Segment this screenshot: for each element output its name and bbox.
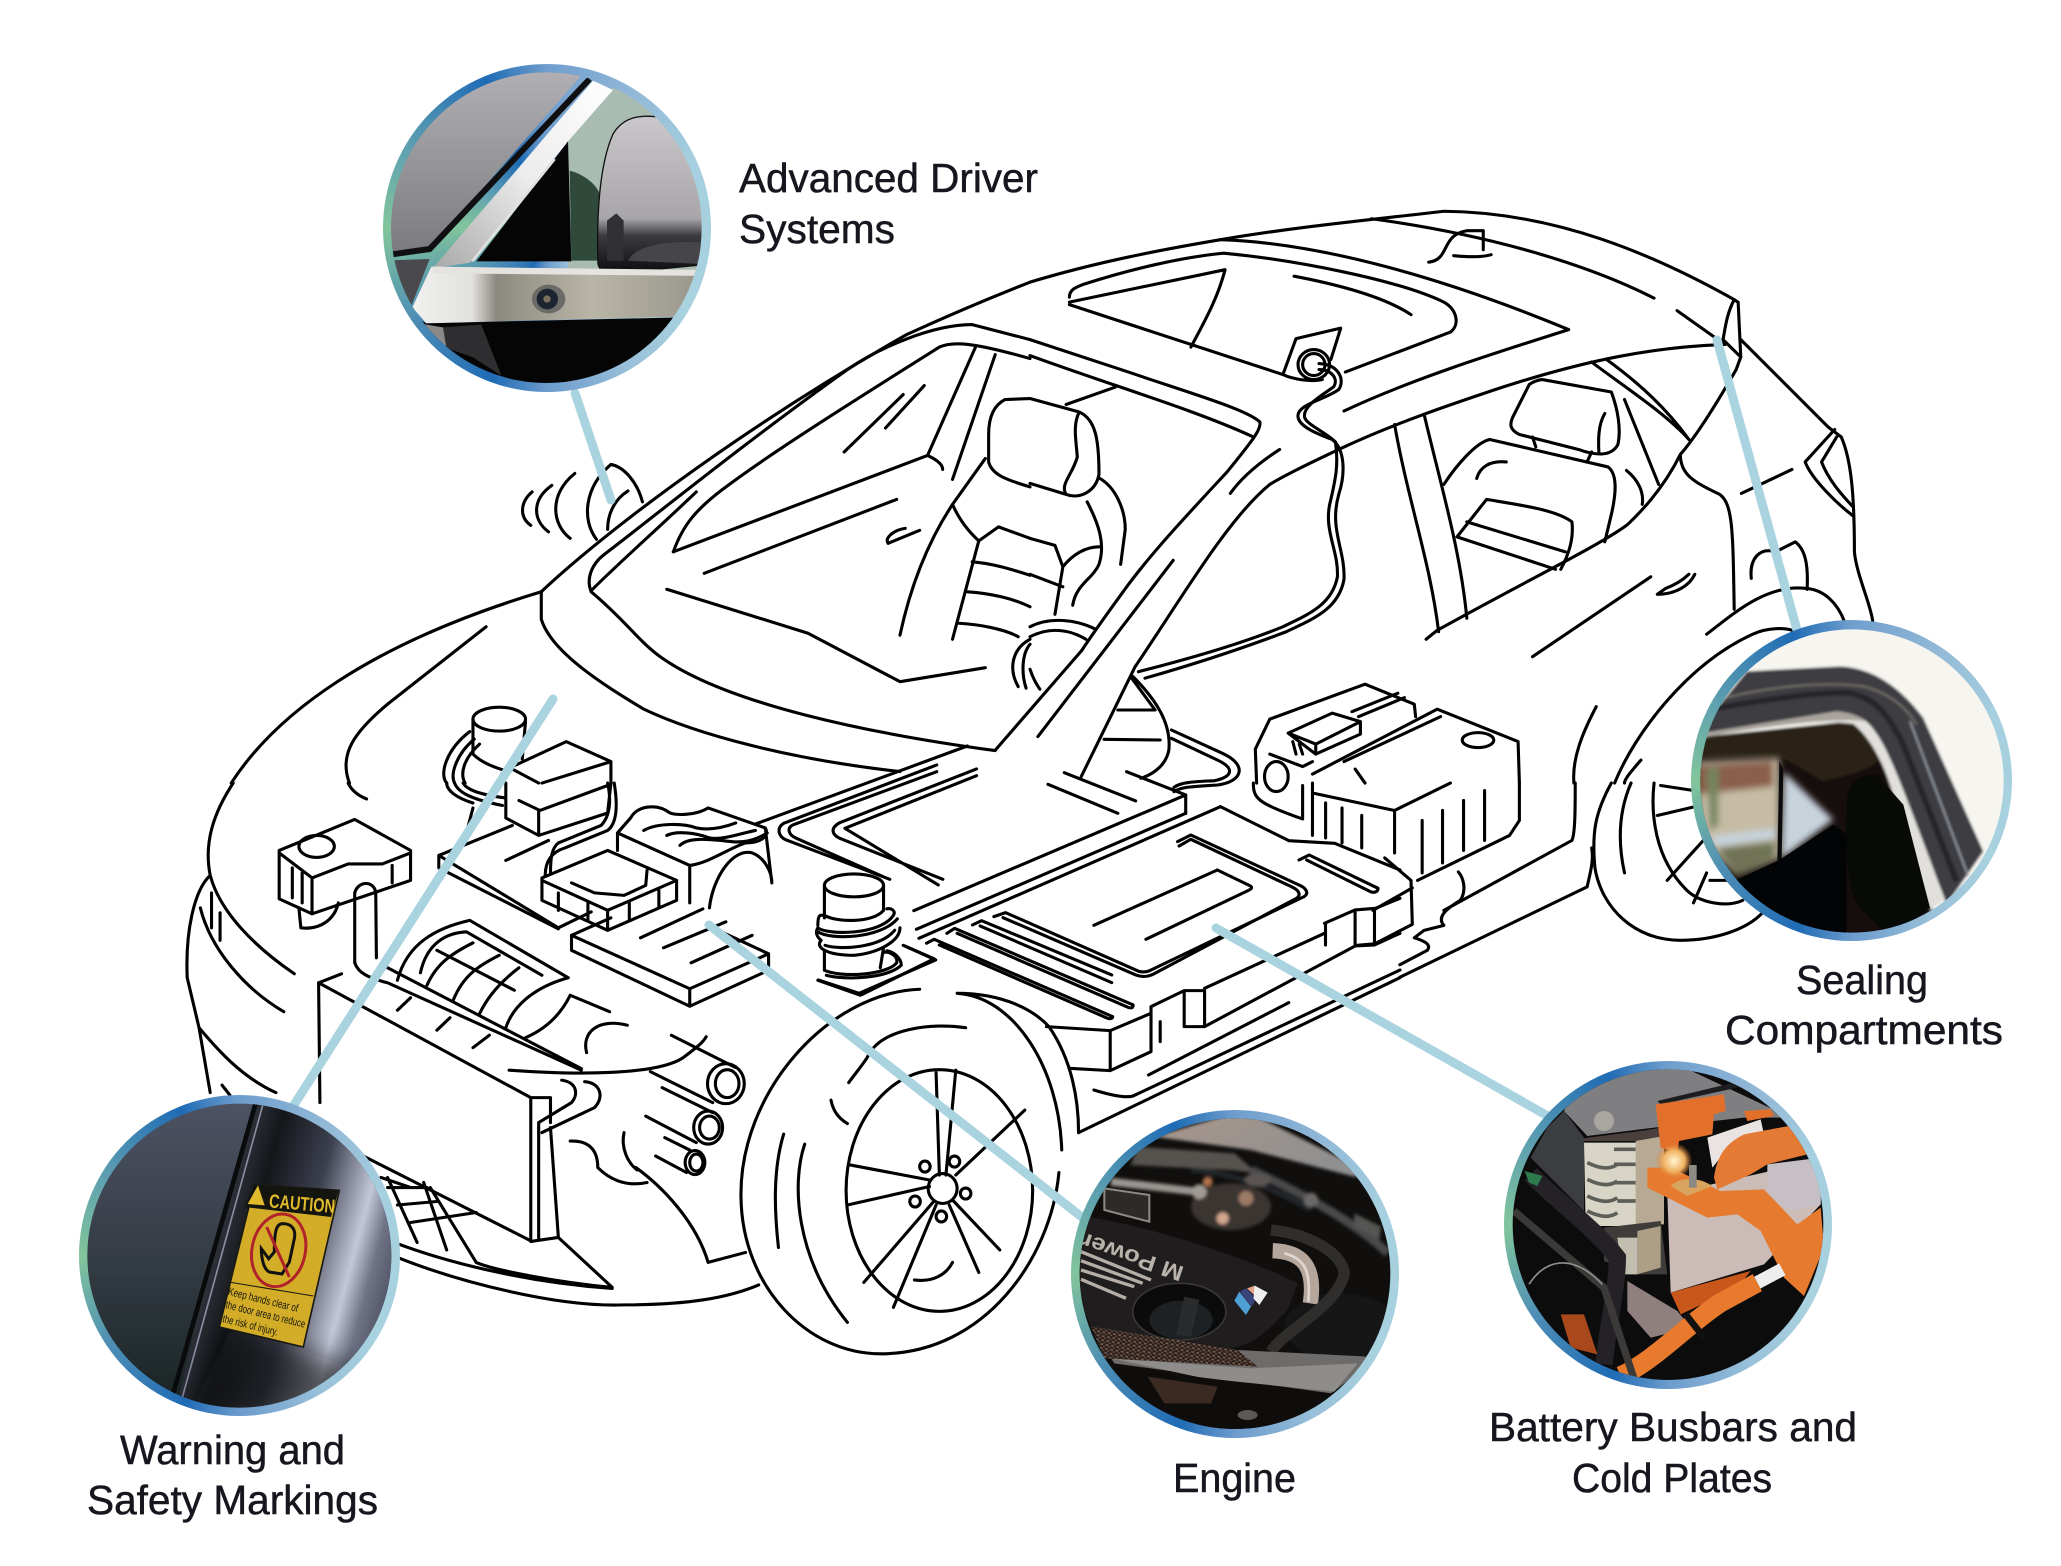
label: Battery Busbars and Cold Plates: Battery Busbars and: [1489, 1404, 1857, 1450]
stud: [1671, 1179, 1712, 1196]
car: windshield, hood and front seat: [231, 282, 1030, 783]
callout photo: battery busbars: [1504, 1061, 1832, 1389]
leader: sealing compartments: [1717, 340, 1797, 630]
black trim: [383, 79, 590, 256]
label: Advanced Driver Systems: Advanced Driver: [739, 155, 1038, 201]
module side: [1531, 1111, 1584, 1211]
window pillar: [1777, 761, 1783, 861]
chrome pipe: [1273, 1251, 1312, 1303]
M Power lettering: M Power: [1077, 1228, 1187, 1286]
caution sticker: the risk of injury.: [221, 1313, 279, 1339]
car: bumper, radiator, engine bay and front wheel: [187, 783, 1059, 1354]
base: [1671, 1271, 1751, 1314]
translucent cover: [1667, 1161, 1821, 1293]
car: floor platform and battery plate: [756, 650, 1400, 1150]
M badge: [1234, 1285, 1268, 1315]
green reflection: [568, 87, 711, 271]
leader: engine: [709, 925, 1083, 1218]
chrome strip: [433, 81, 613, 268]
cover vent stripes: [1081, 1252, 1151, 1298]
gasket: [1700, 666, 1983, 905]
white door frame: [1718, 629, 2004, 912]
callout photo: side camera on door mirror: [383, 64, 711, 392]
label: Warning and Safety Markings: Safety Markings: [87, 1477, 378, 1523]
interior: [1700, 723, 1934, 933]
callout photo: caution label: [79, 1095, 400, 1416]
module top plate: [1564, 1069, 1780, 1136]
mirror: [598, 116, 711, 273]
quarter window: [476, 141, 571, 261]
orange cable: [1621, 1283, 1757, 1376]
label: Sealing Compartments: [1725, 957, 2003, 1053]
callout photo: door seal: [1691, 620, 2012, 941]
orange cover: [1656, 1094, 1726, 1153]
pillar right: [179, 1104, 392, 1408]
caution sticker: the door area to reduce: [224, 1299, 306, 1331]
lower door black: [422, 318, 673, 383]
leader: advanced driver systems: [575, 393, 611, 500]
car: roof, sunroof, cable and rear seat: [1030, 211, 1873, 792]
seat dark: [1846, 775, 1930, 938]
leader: warning markings: [292, 699, 553, 1108]
lower left panel: [394, 259, 430, 305]
label: Warning and Safety Markings: [87, 1427, 378, 1523]
car: battery body and rear wheel: [1253, 783, 1762, 977]
label: Advanced Driver Systems: Systems: [739, 206, 895, 252]
orange bracket: [1561, 1314, 1597, 1354]
cells: [1584, 1143, 1637, 1226]
cover: [1071, 1217, 1298, 1348]
caution sticker: CAUTION: [268, 1191, 336, 1218]
label: Warning and Safety Markings: Warning and: [120, 1427, 345, 1473]
leader: battery: [1216, 928, 1546, 1115]
chrome sill: [412, 267, 711, 323]
underside: [1120, 1376, 1331, 1429]
wrapped conduit: [1531, 1174, 1617, 1364]
metal panel left: [87, 1104, 392, 1408]
label: Battery Busbars and Cold Plates: Cold Plates: [1572, 1455, 1772, 1501]
label: Engine: Engine: [1173, 1455, 1296, 1501]
hose: [1271, 1230, 1344, 1352]
carbon band: [1091, 1327, 1368, 1393]
door glass: [391, 72, 580, 252]
sensor block: [1104, 1188, 1149, 1222]
oil cap: [1133, 1283, 1226, 1340]
label: Sealing Compartments: Compartments: [1725, 1007, 2003, 1053]
caution sticker: [219, 1185, 339, 1347]
engine bay background: [1111, 1110, 1398, 1360]
pale trim: [1703, 711, 1945, 910]
callout photo: engine cover: [1071, 1110, 1399, 1438]
label: Advanced Driver Systems: [739, 155, 1038, 252]
camera: [532, 285, 565, 313]
label: Sealing Compartments: Sealing: [1796, 957, 1928, 1003]
label: Battery Busbars and Cold Plates: [1489, 1404, 1857, 1501]
window scene: [1697, 758, 1833, 876]
caution sticker: Keep hands clear of: [227, 1286, 300, 1315]
